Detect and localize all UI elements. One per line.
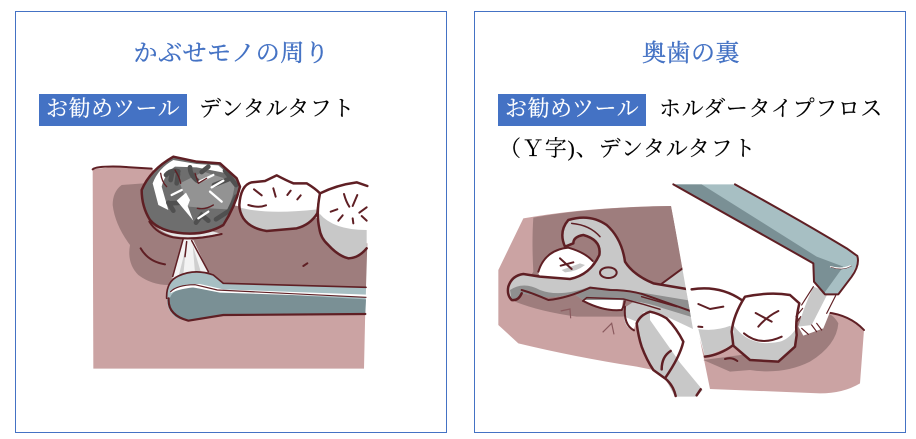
text: holder type floss: ホルダータイプフロス xyxy=(659,96,883,121)
molar 2 xyxy=(317,182,367,258)
tooth front xyxy=(732,294,799,362)
illustration: Y floss holder on rear teeth xyxy=(498,184,864,397)
brush handle xyxy=(673,184,858,294)
back tooth xyxy=(538,248,593,278)
tuft bristles xyxy=(172,238,208,278)
text: dental tuft: デンタルタフト xyxy=(199,96,355,121)
floss holder xyxy=(509,218,691,316)
gum lines xyxy=(141,248,307,266)
badge: recommended tool: お勧めツール xyxy=(505,96,639,121)
crown tooth xyxy=(142,157,240,238)
gum right xyxy=(698,312,864,393)
finger xyxy=(637,312,703,397)
tooth back xyxy=(692,288,742,357)
heading: crown surroundings: かぶせモノの周り xyxy=(134,41,329,67)
molar 1 xyxy=(239,175,320,231)
lower tooth xyxy=(584,300,623,310)
panel: crown surroundings xyxy=(16,12,446,432)
panel: back of molars xyxy=(474,12,906,432)
gray arm behind xyxy=(624,270,693,329)
text: Y shape and dental tuft: （Ｙ字)、デンタルタフト xyxy=(499,136,756,161)
tuft bristles xyxy=(798,287,837,336)
badge: recommended tool: お勧めツール xyxy=(46,96,180,121)
illustration: tuft brush at crown xyxy=(93,157,367,369)
brush handle xyxy=(167,272,366,321)
heading: back of molars: 奥歯の裏 xyxy=(642,40,740,67)
